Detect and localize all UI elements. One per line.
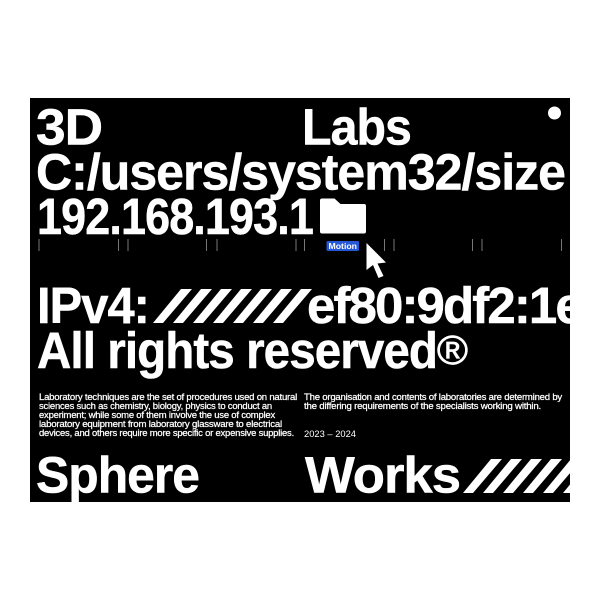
heading: All rights reserved: All rights reserved	[37, 322, 437, 379]
text block: laboratory techniques: sciences such as chemistry, biology, physics to conduct an	[39, 401, 272, 411]
icon: mouse cursor	[366, 243, 386, 278]
text block: organisation of laboratories: the differing requirements of the specialists working within.	[304, 401, 541, 411]
heading: IP address: 192.168.193.1	[37, 188, 313, 245]
poster content	[36, 98, 600, 504]
timeline tick marks	[38, 239, 562, 251]
text block: laboratory techniques: laboratory equipment from laboratory glassware to electrical	[39, 419, 282, 429]
heading: IPv4: IPv4:	[37, 277, 149, 334]
heading: Sphere: Sphere	[36, 446, 199, 504]
text: date range: 2023 – 2024	[304, 429, 356, 439]
text block: laboratory techniques	[39, 392, 297, 438]
text block: organisation of laboratories	[304, 392, 563, 411]
heading: Works: Works	[305, 446, 460, 504]
text block: laboratory techniques: experiment; while some of them involve the use of complex	[39, 410, 276, 420]
text block: laboratory techniques: devices, and others require more specific or expensive supplies.	[39, 428, 294, 438]
text block: organisation of laboratories: The organisation and contents of laboratories are determined by	[304, 392, 563, 402]
stripes: Works line	[463, 459, 570, 493]
heading: file path: C:/users/system32/size	[36, 144, 565, 200]
heading: 3D: 3D	[36, 98, 102, 156]
panel: black poster background	[30, 98, 570, 502]
mark: registered symbol: ®	[437, 327, 468, 373]
icon: folder	[320, 198, 366, 234]
stripes: IPv4 line	[153, 289, 312, 323]
label: Motion tag: Motion	[328, 241, 357, 251]
heading: Labs: Labs	[302, 98, 411, 156]
text block: laboratory techniques: Laboratory techniques are the set of procedures used on natural	[39, 392, 297, 402]
icon: white dot	[548, 106, 561, 120]
